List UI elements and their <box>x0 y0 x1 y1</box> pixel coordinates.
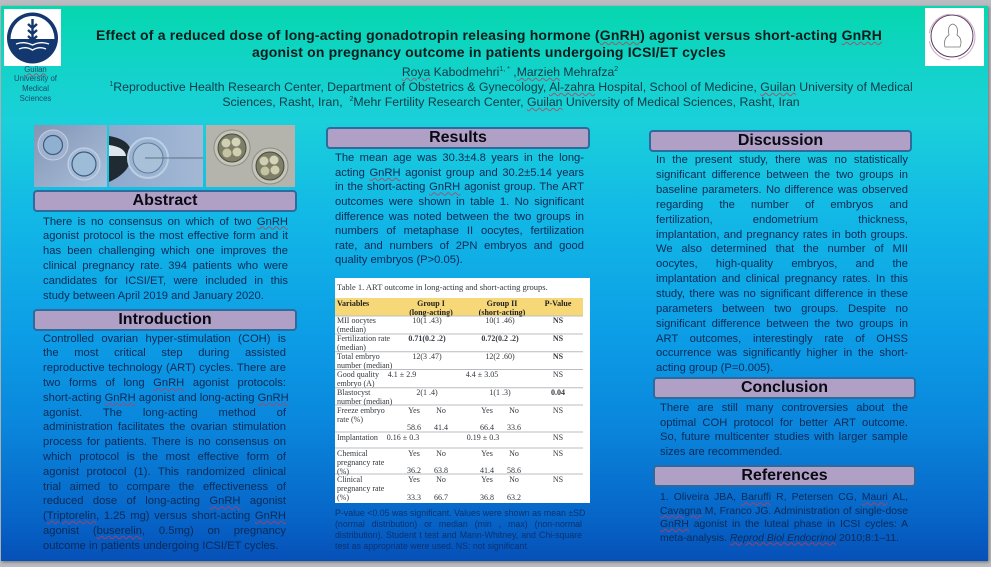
table rows: No <box>436 475 446 484</box>
table rows: NS <box>553 475 563 484</box>
table rows: rate (%) <box>337 415 363 424</box>
heading: conclusion <box>653 377 916 399</box>
table rows: Total embryo <box>337 352 380 361</box>
table rows: Yes <box>408 475 420 484</box>
discussion text: study, there was no significant difference in these <box>656 288 908 300</box>
table rows: number (median) <box>337 361 393 370</box>
results text: rate, and numbers of 2PN embryos and good <box>335 240 584 252</box>
table rows: MII oocytes <box>337 316 376 325</box>
table rows: 10(1 .46) <box>485 316 515 325</box>
heading: abstract: Abstract <box>133 192 197 209</box>
conclusion text: There are still many controversies about the <box>660 402 908 414</box>
table footnote: test as appropriate were used. NS: not significant. <box>335 540 529 550</box>
table footnote: (normal distribution) or median (min , max) (non-normal <box>335 518 582 528</box>
discussion text <box>656 154 908 374</box>
affiliations <box>109 80 913 112</box>
introduction text: reproductive technology (ART) cycles. There are <box>43 362 286 374</box>
abstract text: has been challenging which one improves the <box>43 245 288 257</box>
results text: difference was noted between the two groups in <box>335 211 584 223</box>
introduction text: Controlled ovarian hyper-stimulation (COH) is <box>43 333 286 345</box>
table rows: 41.4 <box>480 466 494 475</box>
table rows: Yes <box>481 406 493 415</box>
table rows: Fertilization rate <box>337 334 391 343</box>
introduction text: trial aimed to compare the effectiveness of <box>43 481 286 493</box>
discussion text: acting group (P=0.005). <box>656 362 773 374</box>
discussion text: regarding the number of embryos and <box>656 199 908 211</box>
logo: Guilan University of Medical Sciences: Medical <box>22 84 49 93</box>
abstract text: clinical pregnancy rate. 394 patients who were <box>43 260 288 272</box>
table rows: No <box>509 475 519 484</box>
table rows: 0.71(0.2 .2) <box>408 334 446 343</box>
panel: discussion <box>649 130 912 374</box>
table rows: No <box>436 449 446 458</box>
discussion text: significant difference between the two groups in <box>656 169 908 181</box>
results text: in the short-acting GnRH agonist group. The ART <box>335 181 584 193</box>
introduction text: two forms of long GnRH agonist protocols: <box>43 377 286 389</box>
introduction text: agonist protocol (1). This randomized clinical <box>43 466 286 478</box>
heading: results: Results <box>429 129 487 146</box>
discussion text: parameters between two groups. Despite no <box>656 303 908 315</box>
references text: GnRH agonist in the luteal phase in ICSI cycles: A <box>660 519 908 530</box>
introduction text: the most critical step during assisted <box>43 347 286 359</box>
discussion text: implantation, and pregnancy rates in both groups. <box>656 229 908 241</box>
introduction text: administration facilitates the ovarian stimulation <box>43 421 286 433</box>
discussion text: In the present study, there was no statistically <box>656 154 908 166</box>
table footnote: distribution). Student t test and Mann-Whitney, and Chi-square <box>335 530 582 540</box>
introduction text: agonist. The long-acting method of <box>43 407 286 419</box>
table rows: No <box>509 449 519 458</box>
table rows: 66.4 <box>480 423 494 432</box>
discussion text: implantation and clinical pregnancy rates. In this <box>656 273 908 285</box>
introduction text: outcome in patients undergoing ICSI/ET cycles. <box>43 540 278 552</box>
table rows: 33.3 <box>407 493 421 502</box>
table header: (long-acting) <box>409 308 453 317</box>
table footnote: P-value <0.05 was significant. Values were shown as mean ±SD <box>335 508 585 518</box>
results text: numbers of metaphase II oocytes, fertilization <box>335 225 584 237</box>
table rows: NS <box>553 352 564 361</box>
introduction text: short-acting GnRH agonist and long-acting GnRH <box>43 392 289 404</box>
table rows: NS <box>553 433 563 442</box>
table rows: embryo (A) <box>337 379 375 388</box>
table rows: 0.04 <box>551 388 565 397</box>
discussion text: oocytes, high-quality embryos, and the <box>656 258 908 270</box>
table rows: 0.19 ± 0.3 <box>467 433 499 442</box>
table rows: 63.2 <box>507 493 521 502</box>
affiliations: Sciences, Rasht, Iran, 2Mehr Fertility Research Center, Guilan University of Medical Sciences, Rasht, Iran <box>222 95 800 109</box>
table rows: Yes <box>408 406 420 415</box>
abstract text: candidates for ICSI/ET, were included in this <box>43 275 288 287</box>
table rows: 10(1 .43) <box>412 316 442 325</box>
table header: Group I <box>417 299 445 308</box>
abstract text: agonist protocol is the most effective form and it <box>43 230 288 242</box>
table rows: Clinical <box>337 475 363 484</box>
table header: P-Value <box>545 299 572 308</box>
table rows: Yes <box>481 449 493 458</box>
logo: Mehr Fertility center <box>925 8 984 66</box>
introduction text: which protocol is the most effective form of <box>43 451 286 463</box>
logo: Guilan University of Medical Sciences <box>4 9 61 103</box>
table header: Group II <box>487 299 517 308</box>
table rows: NS <box>553 370 563 379</box>
table caption: Table 1. ART outcome in long-acting and short-acting groups. <box>337 282 548 292</box>
table rows: (%) <box>337 493 349 502</box>
panel: references <box>653 465 916 546</box>
table header <box>335 298 583 317</box>
table rows: 36.8 <box>480 493 494 502</box>
references text: meta-analysis. Reprod Biol Endocrinol 2010;8:1–11. <box>660 533 899 544</box>
table rows: NS <box>553 334 564 343</box>
results text <box>335 152 584 266</box>
table rows: Chemical <box>337 449 368 458</box>
logo: Guilan University of Medical Sciences: Guilan <box>24 64 47 74</box>
heading: introduction: Introduction <box>118 311 212 328</box>
references text <box>660 492 908 546</box>
heading: conclusion: Conclusion <box>741 379 828 396</box>
panel: results <box>326 127 590 266</box>
table rows: 58.6 <box>407 423 421 432</box>
table rows: Yes <box>408 449 420 458</box>
table rows: 41.4 <box>434 423 448 432</box>
abstract text: There is no consensus on which of two GnRH <box>43 216 288 228</box>
table rows: pregnancy rate <box>337 484 385 493</box>
table rows: 2(1 .4) <box>416 388 438 397</box>
references text: Cavagna M, Franco JG. Administration of single-dose <box>660 506 908 517</box>
logo: Guilan University of Medical Sciences: University of <box>14 74 57 83</box>
heading: introduction <box>33 309 297 331</box>
title <box>96 27 882 60</box>
table rows: NS <box>553 449 563 458</box>
title: Effect of a reduced dose of long-acting gonadotropin releasing hormone (GnRH) agonist versus short-acting GnRH <box>96 27 882 43</box>
table rows: NS <box>553 316 564 325</box>
heading: discussion: Discussion <box>738 132 823 149</box>
affiliations: 1Reproductive Health Research Center, Department of Obstetrics & Gynecology, Al-zahra Hospital, School of Medicine, Guilan University of Medical <box>109 80 913 94</box>
table header: Variables <box>337 299 369 308</box>
table rows: Good quality <box>337 370 379 379</box>
conclusion text: sizes are recommended. <box>660 446 782 458</box>
title: agonist on pregnancy outcome in patients undergoing ICSI/ET cycles <box>252 44 726 60</box>
table rows: pregnancy rate <box>337 458 385 467</box>
table rows: 36.2 <box>407 466 421 475</box>
results text: quality embryos (P>0.05). <box>335 254 463 266</box>
conclusion text: optimal COH protocol for better ART outcome. <box>660 417 908 429</box>
table rows: 58.6 <box>507 466 521 475</box>
results text: outcomes were shown in table 1. No significant <box>335 196 584 208</box>
table rows: (median) <box>337 325 366 334</box>
discussion text: fertilization, endometrium thickness, <box>656 214 908 226</box>
discussion text: baseline parameters. No difference was observed <box>656 184 908 196</box>
table rows: (%) <box>337 467 349 476</box>
abstract text: study between April 2019 and January 2020. <box>43 290 264 302</box>
photos: oocytes, ICSI injection, embryos <box>34 125 295 187</box>
heading: discussion <box>649 130 912 152</box>
table rows: 0.72(0.2 .2) <box>481 334 519 343</box>
discussion text: ART outcomes, interestingly rate of OHSS <box>656 333 908 345</box>
results text: acting GnRH agonist group and 30.2±5.14 years <box>335 167 584 179</box>
table rows: No <box>509 406 519 415</box>
discussion text: occurrence was significantly higher in the short- <box>656 347 908 359</box>
table rows: 0.16 ± 0.3 <box>387 433 419 442</box>
table rows: No <box>436 406 446 415</box>
conclusion text: So, future multicenter studies with larger sample <box>660 431 908 443</box>
panel: introduction <box>33 309 297 552</box>
table rows: Yes <box>481 475 493 484</box>
table rows: NS <box>553 406 563 415</box>
table rows: Freeze embryo <box>337 406 385 415</box>
authors: Roya Kabodmehri1, * ,Marzieh Mehrafza2 <box>402 65 618 79</box>
introduction text: agonist (buserelin, 0.5mg) on pregnancy <box>43 525 286 537</box>
table rows: 4.1 ± 2.9 <box>388 370 416 379</box>
table rows: 63.8 <box>434 466 448 475</box>
table rows: 33.6 <box>507 423 521 432</box>
panel: abstract <box>33 190 297 302</box>
introduction text: (Triptorelin, 1.25 mg) versus short-acting GnRH <box>43 510 286 522</box>
discussion text: significant difference between the two groups in <box>656 318 908 330</box>
introduction text: reduced dose of long-acting GnRH agonist <box>43 495 286 507</box>
table rows: 4.4 ± 3.05 <box>466 370 498 379</box>
table rows: 12(3 .47) <box>412 352 442 361</box>
heading: abstract <box>33 190 297 212</box>
table rows: 1(1 .3) <box>489 388 511 397</box>
table header: (short-acting) <box>479 308 526 317</box>
heading: references <box>653 465 916 487</box>
table rows: Blastocyst <box>337 388 371 397</box>
table rows: Implantation <box>337 433 378 442</box>
table rows: (median) <box>337 343 366 352</box>
table rows <box>337 316 565 502</box>
table 1: ART outcome <box>335 278 590 503</box>
abstract text <box>43 216 288 302</box>
logo: Guilan University of Medical Sciences: Sciences <box>20 94 51 103</box>
heading: results <box>326 127 590 149</box>
table rows: number (median) <box>337 397 393 406</box>
references text: 1. Oliveira JBA, Baruffi R, Petersen CG, Mauri AL, <box>660 492 908 503</box>
heading: references: References <box>741 467 828 484</box>
panel: conclusion <box>653 377 916 458</box>
table rows: 66.7 <box>434 493 448 502</box>
results text: The mean age was 30.3±4.8 years in the long- <box>335 152 584 164</box>
introduction text <box>43 333 289 552</box>
introduction text: process for patients. There is no consensus on <box>43 436 286 448</box>
discussion text: We also determined that the number of MII <box>656 243 908 255</box>
conclusion text <box>660 402 908 458</box>
table rows: 12(2 .60) <box>485 352 515 361</box>
table footnote <box>335 508 585 551</box>
